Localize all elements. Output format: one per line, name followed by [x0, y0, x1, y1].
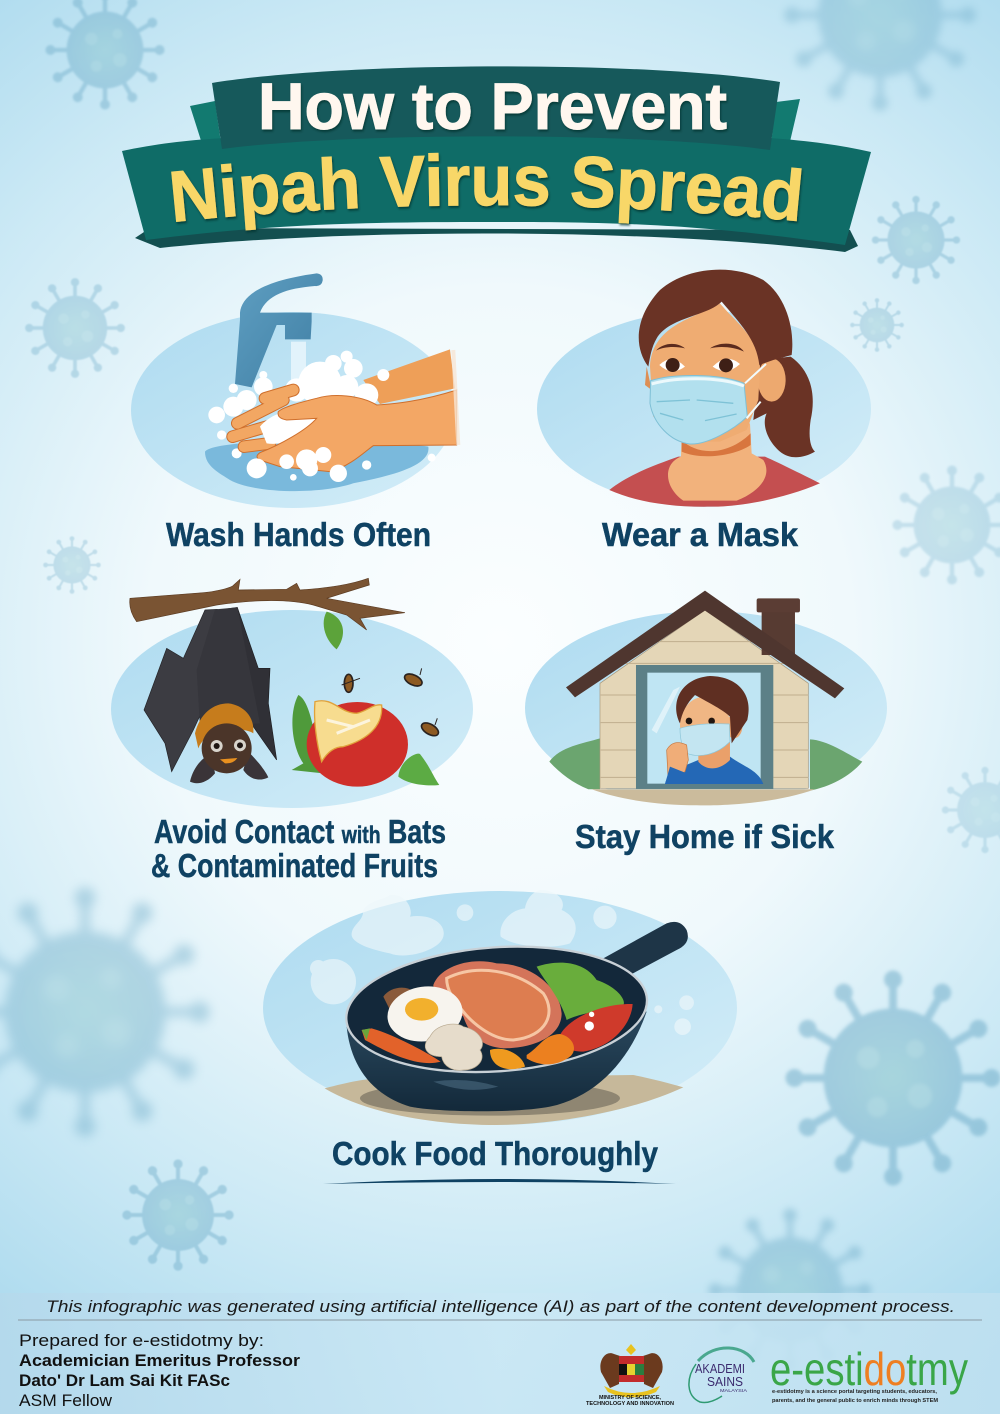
oval background: [263, 891, 737, 1125]
panel: stay home if sick: [525, 591, 887, 855]
author credit: Academician Emeritus Professor: [19, 1351, 300, 1370]
label: stay home if sick: Stay Home if Sick: [575, 818, 835, 855]
oval background: [131, 312, 455, 508]
author credit: Dato' Dr Lam Sai Kit FASc: [19, 1371, 230, 1390]
footer background: [0, 1293, 1000, 1414]
disclaimer: This infographic was generated using artificial intelligence (AI) as part of the content development process.: [46, 1297, 955, 1316]
underline: [323, 1179, 676, 1184]
logo: e-estidotmy: e-estidotmy: [770, 1343, 968, 1395]
lower banner tail shadow: [135, 228, 858, 252]
logo: ministry crest: TECHNOLOGY AND INNOVATION: [586, 1401, 674, 1407]
author credit: Prepared for e-estidotmy by:: [19, 1331, 264, 1350]
logo: ministry crest: MINISTRY OF SCIENCE,: [599, 1395, 661, 1401]
logo: akademi sains malaysia: [689, 1348, 754, 1403]
oval background: [537, 311, 871, 507]
panel: cook food thoroughly: [263, 890, 737, 1184]
back ribbon tails: [190, 99, 800, 152]
footer panel: [0, 1293, 1000, 1414]
label: avoid contact with bats: Avoid Contact with Bats: [154, 813, 446, 850]
panel: wear a mask: [537, 270, 871, 553]
lower banner: [122, 120, 871, 245]
title banner: [122, 66, 871, 252]
title line 1: How to Prevent: [258, 69, 727, 143]
illustration: frying pan with food: [310, 890, 694, 1125]
label: wear a mask: Wear a Mask: [602, 516, 799, 553]
panel: wash hands: [131, 273, 458, 553]
label: contaminated fruits: & Contaminated Fruits: [151, 847, 438, 884]
author credit: [19, 1331, 300, 1410]
oval background: [111, 610, 473, 808]
label: wash hands often: Wash Hands Often: [166, 516, 431, 553]
logo: akademi sains malaysia: SAINS: [707, 1375, 743, 1389]
logo: akademi sains malaysia: MALAYSIA: [720, 1388, 747, 1393]
panel: avoid bats and contaminated fruits: [111, 578, 473, 884]
logo: e-estidotmy: e-estidotmy is a science portal targeting students, educators,: [772, 1389, 937, 1395]
logo: akademi sains malaysia: AKADEMI: [695, 1362, 745, 1376]
upper banner: [212, 66, 780, 150]
illustration: woman wearing mask: [609, 270, 820, 507]
title line 2: Nipah Virus Spread: [171, 152, 804, 233]
illustration: hands under faucet: [205, 273, 458, 491]
label: cook food thoroughly: Cook Food Thoroughly: [332, 1135, 659, 1172]
oval background: [525, 611, 887, 805]
logo: e-estidotmy: parents, and the general public to enrich minds through STEM: [772, 1398, 938, 1404]
author credit: ASM Fellow: [19, 1391, 113, 1410]
logo: ministry crest: [586, 1344, 674, 1407]
illustration: house with masked person in window: [549, 591, 862, 805]
illustration: bat, branch and bitten fruit: [130, 578, 441, 787]
